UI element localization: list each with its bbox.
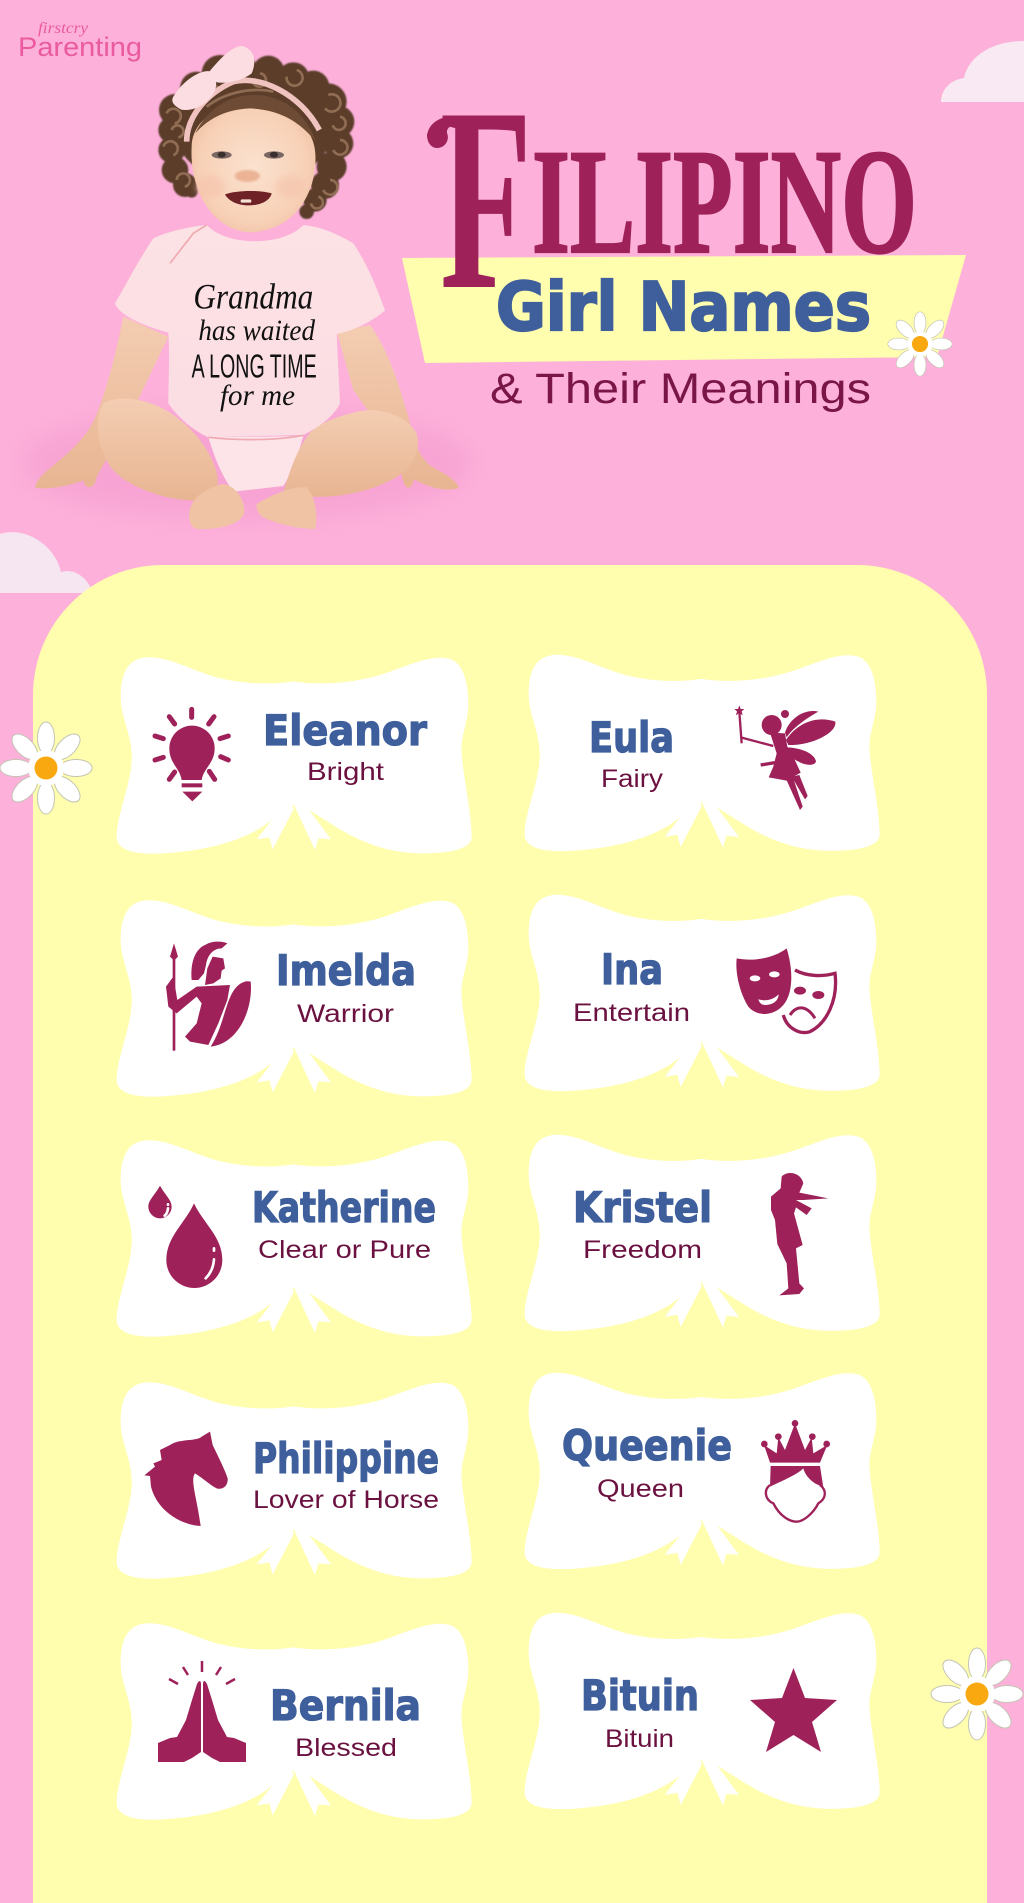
subtitle: & Their Meanings: & Their Meanings (490, 365, 871, 413)
onesie slogan (192, 276, 317, 412)
name: Queenie (562, 1421, 732, 1470)
icon: warrior (166, 942, 251, 1051)
flower on banner (888, 312, 952, 376)
subtitle: Girl Names: Girl Names (496, 268, 871, 346)
name: Eleanor (263, 706, 427, 755)
onesie slogan: for me (220, 380, 295, 412)
meaning: Freedom (583, 1236, 702, 1264)
name: Katherine (252, 1183, 436, 1232)
meaning: Warrior (297, 1000, 394, 1028)
icon: praying hands (158, 1661, 246, 1762)
card: Ina (525, 895, 880, 1091)
yellow title banner (402, 255, 966, 363)
icon: fairy (734, 705, 835, 810)
nose (235, 170, 260, 182)
bow shape (117, 900, 472, 1097)
flower right (931, 1648, 1023, 1740)
icon: star (750, 1668, 837, 1752)
meaning: Bituin (605, 1725, 674, 1753)
bow shape (525, 1373, 880, 1569)
headband (187, 80, 319, 142)
card: Imelda (117, 900, 472, 1097)
title capital F: F (440, 54, 532, 344)
card: Eula (525, 655, 880, 851)
bow shape (525, 655, 880, 851)
meaning: Lover of Horse (253, 1486, 439, 1514)
onesie slogan: A LONG TIME (192, 348, 317, 385)
name: Bituin (581, 1671, 699, 1720)
name: Bernila (270, 1681, 421, 1730)
icon: water drops (148, 1186, 222, 1288)
card: Philippine (117, 1382, 472, 1579)
flower left (0, 722, 92, 814)
onesie snap panel (208, 436, 303, 492)
icon: crowned queen (761, 1420, 830, 1522)
onesie trim (170, 225, 303, 440)
bow shape (117, 657, 472, 854)
logo (18, 20, 142, 62)
name: Ina (601, 945, 663, 994)
bow shape (525, 1613, 880, 1809)
card: Katherine (117, 1140, 472, 1337)
meaning: Bright (307, 758, 384, 786)
hair curls (163, 70, 347, 209)
bow shape (117, 1382, 472, 1579)
panel: yellow names area (33, 565, 987, 1903)
icon: theatre masks (736, 948, 836, 1033)
bow shape (525, 895, 880, 1091)
left leg (98, 399, 218, 501)
card: Queenie (525, 1373, 880, 1569)
left arm (35, 317, 168, 488)
meaning: Blessed (295, 1734, 397, 1762)
bow shape (117, 1140, 472, 1337)
meaning: Queen (597, 1475, 684, 1503)
meaning: Entertain (573, 999, 690, 1027)
cheeks (195, 175, 225, 198)
card: Bituin (525, 1613, 880, 1809)
title: Filipino (427, 54, 917, 344)
card: Bernila (117, 1623, 472, 1820)
left foot (189, 484, 244, 529)
name: Imelda (276, 946, 416, 995)
card: Kristel (525, 1135, 880, 1331)
hair (158, 55, 354, 219)
meaning: Fairy (601, 765, 664, 793)
hair bow (172, 71, 216, 110)
meaning: Clear or Pure (258, 1236, 431, 1264)
logo: Parenting (18, 32, 142, 62)
teeth (241, 199, 251, 203)
card: Eleanor (117, 657, 472, 854)
right foot (257, 487, 316, 529)
onesie (115, 225, 385, 437)
right leg (283, 410, 418, 497)
name: Eula (589, 713, 674, 762)
bow shape (117, 1623, 472, 1820)
name: Kristel (573, 1183, 712, 1232)
logo: firstcry (38, 20, 89, 37)
photo: smiling baby in onesie (20, 46, 473, 529)
onesie slogan: has waited (198, 315, 315, 347)
cloud: top right (941, 41, 1024, 102)
title swash (427, 116, 475, 148)
icon: girl silhouette (771, 1173, 828, 1295)
cloud: left (0, 532, 93, 593)
icon: horse head (144, 1432, 228, 1526)
bow shape (525, 1135, 880, 1331)
cheek right (275, 175, 305, 198)
mouth (225, 191, 272, 205)
onesie slogan: Grandma (193, 276, 313, 316)
fringe (195, 95, 316, 142)
icon: light bulb (155, 709, 228, 801)
eyes (212, 151, 232, 159)
name: Philippine (253, 1434, 439, 1483)
face (191, 102, 315, 232)
right arm (337, 325, 459, 490)
